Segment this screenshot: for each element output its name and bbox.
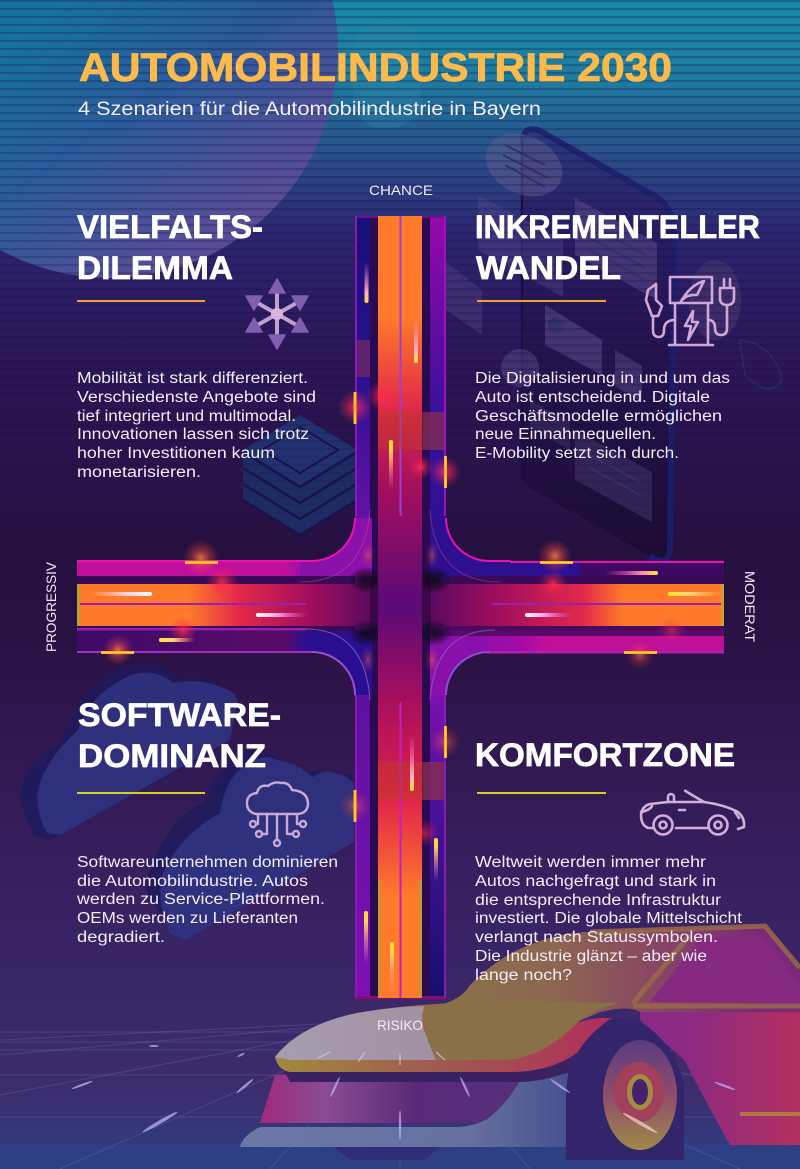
illustration: front cloud xyxy=(146,750,354,940)
divider xyxy=(77,300,205,302)
road: horizontal central bands crossing xyxy=(77,541,724,674)
body text: degradiert. xyxy=(77,929,165,946)
body text: Innovationen lassen sich trotz xyxy=(77,426,309,443)
road: vehicle light trails xyxy=(90,262,724,996)
heading: DOMINANZ xyxy=(78,738,266,774)
side window xyxy=(650,936,800,1002)
road: corner curves xyxy=(77,510,510,700)
body stripe xyxy=(740,1112,800,1116)
body text: investiert. Die globale Mittelschicht xyxy=(475,910,743,927)
icon: diverging arrows xyxy=(246,279,308,349)
axis label: Risiko: RISIKO xyxy=(377,1017,423,1033)
body text: neue Einnahmequellen. xyxy=(475,426,656,443)
car body xyxy=(640,1003,800,1145)
title: AUTOMOBILINDUSTRIE 2030 xyxy=(79,46,672,90)
illustration: sports car xyxy=(240,926,800,1160)
body text: werden zu Service-Plattformen. xyxy=(76,891,325,908)
grille lights xyxy=(318,1052,445,1065)
icon: convertible car xyxy=(641,791,744,834)
background scan lines xyxy=(0,0,800,450)
icon: cloud network xyxy=(247,782,308,846)
axis label: Chance: CHANCE xyxy=(369,182,433,198)
axis label: Moderat: MODERAT xyxy=(742,571,758,642)
body text: tief integriert und multimodal. xyxy=(77,408,296,425)
body text: Mobilität ist stark differenziert. xyxy=(77,370,308,387)
panel: Komfortzone xyxy=(475,737,746,984)
heading: INKREMENTELLER xyxy=(475,209,760,245)
illustration: back cloud xyxy=(20,663,237,840)
panel: Vielfaltsdilemma xyxy=(77,209,320,481)
body text: Autos nachgefragt und stark in xyxy=(475,873,716,890)
road: central lane xyxy=(357,216,444,998)
background small circle xyxy=(353,20,421,128)
road: red glows xyxy=(103,381,686,847)
illustration: server stack xyxy=(243,415,357,535)
heading: VIELFALTS- xyxy=(77,209,263,245)
rear bumper xyxy=(260,1075,520,1123)
icon: charging station xyxy=(646,277,734,345)
wheel xyxy=(566,1018,684,1160)
divider xyxy=(77,792,205,794)
light dashes on grid xyxy=(71,1045,736,1140)
body text: monetarisieren. xyxy=(77,464,201,481)
divider xyxy=(477,300,606,302)
heading: KOMFORTZONE xyxy=(475,737,735,773)
panel: Software-Dominanz xyxy=(76,697,342,946)
body text: Weltweit werden immer mehr xyxy=(475,854,706,871)
body text: Auto ist entscheidend. Digitale xyxy=(475,389,710,406)
heading: DILEMMA xyxy=(77,250,233,286)
body text: Die Digitalisierung in und um das xyxy=(475,370,730,387)
windshield frame xyxy=(420,926,800,1040)
shadow under hood xyxy=(284,1050,570,1082)
body text: hoher Investitionen kaum xyxy=(77,445,275,462)
body text: E-Mobility setzt sich durch. xyxy=(475,445,679,462)
panel: Inkrementeller Wandel xyxy=(475,209,760,462)
body text: verlangt nach Statussymbolen. xyxy=(475,929,718,946)
body text: Verschiedenste Angebote sind xyxy=(77,389,316,406)
heading: WANDEL xyxy=(476,250,621,286)
divider xyxy=(477,792,606,794)
subtitle: 4 Szenarien für die Automobilindustrie in Bayern xyxy=(78,98,541,120)
illustration: perspective grid xyxy=(0,1020,800,1169)
background circle xyxy=(0,0,338,278)
road: horizontal right arm bands xyxy=(430,561,724,654)
body text: lange noch? xyxy=(475,967,572,984)
hood xyxy=(275,1003,612,1072)
front spoiler xyxy=(240,1063,577,1147)
body text: die entsprechende Infrastruktur xyxy=(475,892,721,909)
illustration: smartphone with app cards xyxy=(446,122,782,561)
heading: SOFTWARE- xyxy=(78,697,281,733)
axis label: Progressiv: PROGRESSIV xyxy=(43,561,59,652)
body text: Softwareunternehmen dominieren xyxy=(77,854,338,871)
body text: die Automobilindustrie. Autos xyxy=(77,873,308,890)
body text: Geschäftsmodelle ermöglichen xyxy=(475,408,722,425)
road: vertical lanes xyxy=(355,216,446,999)
road: horizontal left arm bands xyxy=(77,562,372,653)
body text: Die Industrie glänzt – aber wie xyxy=(475,948,707,965)
window pillars xyxy=(590,926,800,1006)
body text: OEMs werden zu Lieferanten xyxy=(77,910,298,927)
